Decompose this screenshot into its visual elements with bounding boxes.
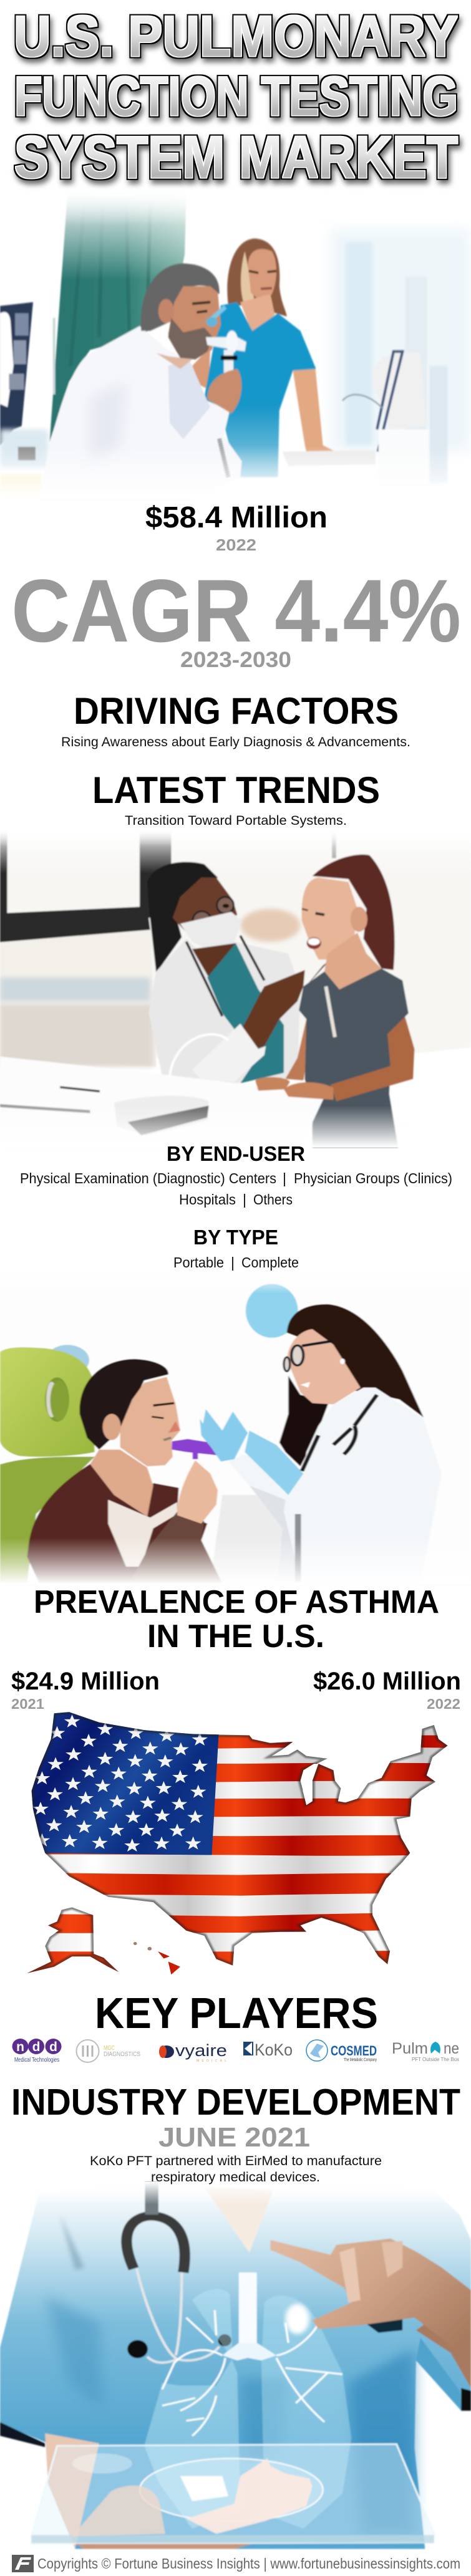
- stat: 2022: 2022: [427, 1696, 460, 1712]
- segment: by end-user: |: [243, 1191, 246, 1208]
- logo: ndd: [12, 2039, 61, 2064]
- icon: Fortune Business Insights logo: [12, 2555, 34, 2572]
- industry development: respiratory medical devices.: [151, 2170, 320, 2184]
- logo: Cosmed: The Metabolic Company: [344, 2058, 377, 2062]
- fades: [0, 188, 471, 226]
- logo: ndd: d: [49, 2040, 57, 2054]
- logo: ndd: Medical Technologies: [14, 2057, 59, 2064]
- patient shirt: [39, 326, 242, 499]
- logo: Vyaire Medical: [159, 2041, 227, 2063]
- logo: ndd: d: [32, 2040, 40, 2054]
- segment: by end-user: Physical Examination (Diagnostic) Centers: [20, 1170, 276, 1186]
- child: [285, 855, 414, 1147]
- photo: clinician with holographic lungs: [0, 2182, 471, 2549]
- latest trends: [92, 769, 380, 828]
- stat: 2021: 2021: [11, 1696, 44, 1712]
- market value 2022: $58.4 Million: [145, 501, 328, 534]
- logo: Vyaire Medical: vyaire: [175, 2041, 227, 2060]
- logo: PulmOne: Pulm: [392, 2040, 428, 2057]
- driving factors: Rising Awareness about Early Diagnosis & Advancements.: [61, 735, 410, 749]
- spirometer and hand: [206, 307, 246, 413]
- key players heading: KEY PLAYERS: [95, 1989, 378, 2037]
- photo: patient with purple peak flow meter and doctor: [0, 1272, 471, 1585]
- table with device: [0, 1034, 333, 1147]
- segment: by type: [173, 1226, 299, 1271]
- patient: [27, 1359, 233, 1584]
- fades: [0, 829, 471, 846]
- window frame: [0, 831, 336, 942]
- logo: MGC Diagnostics: [76, 2040, 140, 2062]
- patient head: [141, 263, 221, 369]
- flag map of the U.S.: [27, 1712, 448, 1975]
- stethoscope: [127, 2182, 231, 2363]
- doctor: [200, 1304, 442, 1584]
- segment: by end-user: Hospitals: [179, 1191, 236, 1208]
- logo: PulmOne: [392, 2040, 459, 2062]
- driving factors: [61, 690, 410, 749]
- segment: by end-user: |: [283, 1170, 286, 1186]
- company logos: [12, 2039, 459, 2064]
- holographic lungs: [144, 2272, 351, 2529]
- stat: 2022: $26.0 Million: [313, 1668, 461, 1695]
- logo: Cosmed: COSMED: [331, 2043, 377, 2059]
- market value 2022: 2022: [216, 536, 256, 554]
- segment: by end-user: BY END-USER: [167, 1142, 305, 1165]
- fades: [0, 2182, 471, 2204]
- segment: by type: Portable: [173, 1254, 224, 1271]
- stat: 2022: [313, 1668, 461, 1712]
- wall monitor: [0, 302, 33, 445]
- wall discs: [46, 1284, 298, 1375]
- laptop and desk: [219, 352, 447, 487]
- stat: 2021: $24.9 Million: [11, 1668, 160, 1695]
- fades: [0, 1272, 471, 1294]
- prevalence heading: IN THE U.S.: [147, 1618, 324, 1655]
- latest trends: LATEST TRENDS: [92, 769, 380, 811]
- logo: PulmOne: PFT Outside The Box: [412, 2057, 459, 2062]
- logo: Vyaire Medical: MEDICAL: [197, 2059, 226, 2063]
- segment: by type: BY TYPE: [193, 1226, 278, 1249]
- scrubs: [0, 2184, 471, 2549]
- logo: PulmOne: ne: [444, 2040, 459, 2057]
- segment: by end-user: Others: [253, 1191, 293, 1208]
- logo: Cosmed: [306, 2040, 377, 2062]
- photo: patient using spirometer with nurse: [0, 188, 471, 499]
- segment: by end-user: [20, 1142, 452, 1208]
- photo: doctor with child using nebulizer: [0, 829, 471, 1147]
- CAGR: 2023-2030: [180, 648, 291, 672]
- segment: by type: |: [231, 1254, 235, 1271]
- prevalence heading: PREVALENCE OF ASTHMA: [34, 1584, 439, 1620]
- market value 2022: [145, 501, 328, 554]
- latest trends: Transition Toward Portable Systems.: [125, 814, 347, 828]
- green chair: [0, 1347, 95, 1584]
- holographic tablet: [32, 2444, 434, 2549]
- industry development: [11, 2082, 460, 2184]
- driving factors: DRIVING FACTORS: [74, 690, 399, 732]
- segment: by end-user: Physician Groups (Clinics): [294, 1170, 452, 1186]
- logo: MGC Diagnostics: MGC: [104, 2045, 115, 2052]
- nurse: [192, 239, 351, 477]
- green curtain: [49, 188, 192, 442]
- logo: ndd: n: [16, 2040, 24, 2054]
- segment: by type: Complete: [241, 1254, 299, 1271]
- industry development: KoKo PFT partnered with EirMed to manufacture: [90, 2154, 382, 2168]
- prevalence heading: [34, 1584, 439, 1655]
- logo: MGC Diagnostics: DIAGNOSTICS: [104, 2051, 140, 2058]
- doctor: [147, 862, 305, 1084]
- title: [14, 4, 458, 191]
- logo: KoKo: KoKo: [255, 2040, 293, 2059]
- stat: 2021: [11, 1668, 160, 1712]
- industry development: JUNE 2021: [158, 2122, 310, 2153]
- pointing hand: [270, 2239, 471, 2388]
